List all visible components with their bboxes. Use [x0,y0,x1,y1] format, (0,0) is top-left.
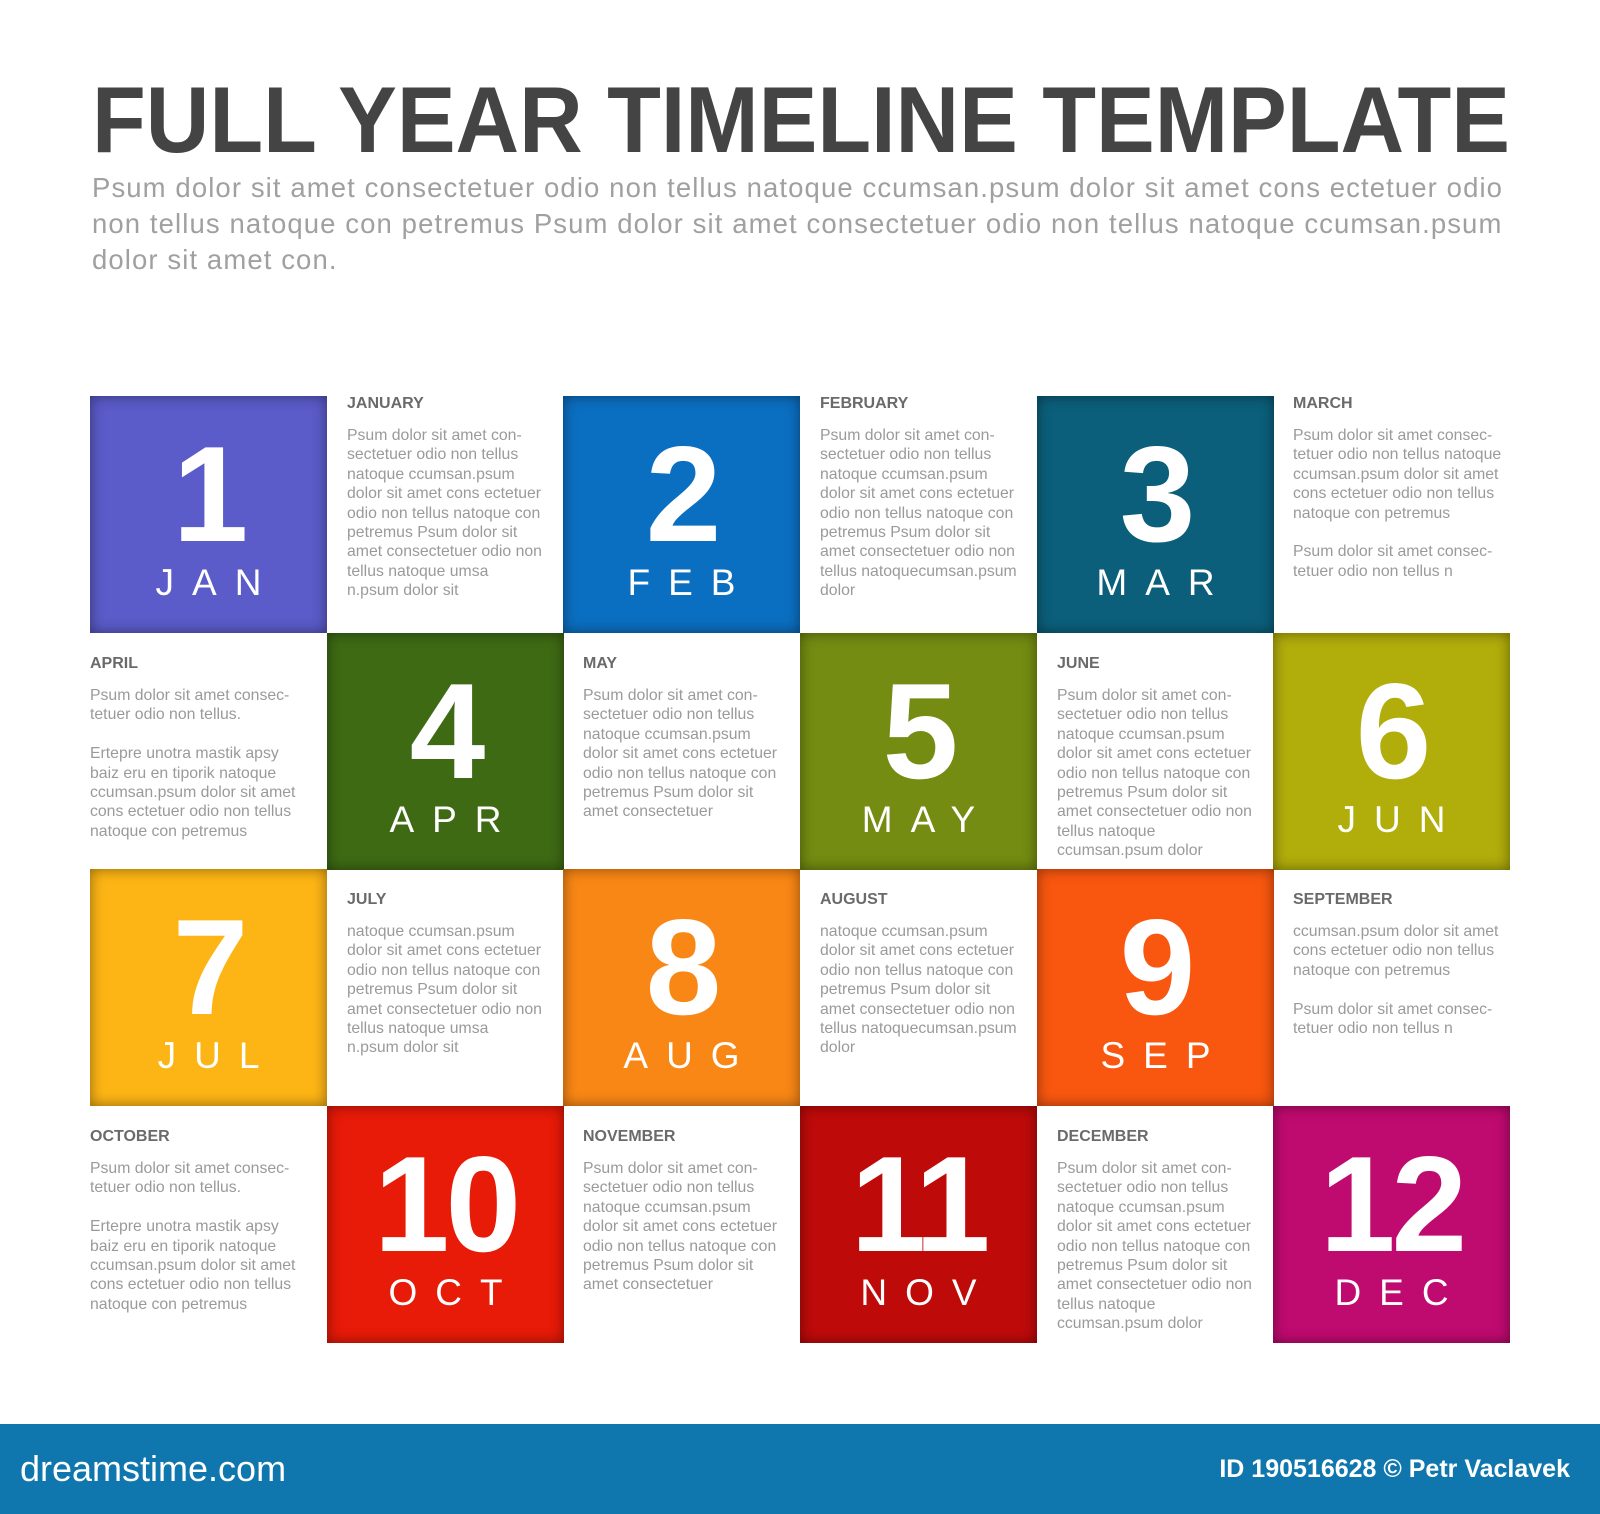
text: february: tellus natoquecumsan.psum [820,563,1017,580]
box: dec [1273,1106,1510,1343]
text: september: SEPTEMBER [1293,891,1393,908]
box: apr [327,633,564,870]
text: november: dolor sit amet cons ectetuer [583,1218,777,1235]
text: august: dolor [820,1039,855,1056]
text: september: ccumsan.psum dolor sit amet [1293,923,1498,940]
box: jan: JAN [156,562,279,603]
text: september: tetuer odio non tellus n [1293,1020,1453,1037]
text: may: amet consectetuer [583,803,713,820]
text: april: Psum dolor sit amet consec- [90,687,289,704]
text: july: amet consectetuer odio non [347,1001,542,1018]
box: may [800,633,1037,870]
text: july: n.psum dolor sit [347,1039,459,1056]
text: may: MAY [583,655,617,672]
box: mar: MAR [1096,562,1233,603]
box: aug: AUG [623,1035,758,1076]
text: june: ccumsan.psum dolor [1057,842,1203,859]
text: march: tetuer odio non tellus natoque [1293,446,1501,463]
text: november: NOVEMBER [583,1128,675,1145]
footer logo: dreamstime.com [20,1448,286,1489]
text: may: Psum dolor sit amet con- [583,687,758,704]
text: december: sectetuer odio non tellus [1057,1179,1228,1196]
box: feb: 2 [646,418,717,570]
text: november: natoque ccumsan.psum [583,1199,751,1216]
text: april: ccumsan.psum dolor sit amet [90,784,295,801]
text: december [1057,1128,1252,1332]
text: january: JANUARY [347,395,424,412]
text: may [583,655,777,820]
text: march: cons ectetuer odio non tellus [1293,485,1494,502]
text: november: sectetuer odio non tellus [583,1179,754,1196]
box: oct: OCT [388,1272,521,1313]
text: september [1293,891,1498,1037]
box: dec: DEC [1334,1272,1467,1313]
text: october: OCTOBER [90,1128,170,1145]
text: march: tetuer odio non tellus n [1293,563,1453,580]
box: jan [90,396,327,633]
text: november: amet consectetuer [583,1276,713,1293]
subtitle: dolor sit amet con. [92,244,338,275]
text: december: dolor sit amet cons ectetuer [1057,1218,1251,1235]
text: february: dolor [820,582,855,599]
text: may: dolor sit amet cons ectetuer [583,745,777,762]
text: april: cons ectetuer odio non tellus [90,803,291,820]
text: august: natoque ccumsan.psum [820,923,988,940]
box: sep [1037,869,1274,1106]
box: jun: JUN [1338,799,1463,840]
text: september: cons ectetuer odio non tellus [1293,942,1494,959]
text: may: odio non tellus natoque con [583,765,776,782]
text: september: natoque con petremus [1293,962,1450,979]
subtitle: non tellus natoque con petremus Psum dolor sit amet consectetuer odio non tellus natoque ccumsan.psum [92,208,1502,239]
text: august: amet consectetuer odio non [820,1001,1015,1018]
text: february: FEBRUARY [820,395,908,412]
text: june: Psum dolor sit amet con- [1057,687,1232,704]
text: january: natoque ccumsan.psum [347,466,515,483]
text: july [347,891,542,1056]
box: aug [563,869,800,1106]
text: october: cons ectetuer odio non tellus [90,1276,291,1293]
text: june [1057,655,1252,859]
text: october: tetuer odio non tellus. [90,1179,241,1196]
text: january: tellus natoque umsa [347,563,488,580]
text: january: Psum dolor sit amet con- [347,427,522,444]
box: sep: 9 [1120,891,1191,1043]
text: june: petremus Psum dolor sit [1057,784,1227,801]
box: oct: 10 [374,1128,517,1280]
text: february: petremus Psum dolor sit [820,524,990,541]
text: june: natoque ccumsan.psum [1057,726,1225,743]
text: september: Psum dolor sit amet consec- [1293,1001,1492,1018]
text: october: baiz eru en tiporik natoque [90,1238,276,1255]
text: april: baiz eru en tiporik natoque [90,765,276,782]
text: october: ccumsan.psum dolor sit amet [90,1257,295,1274]
text: august: dolor sit amet cons ectetuer [820,942,1014,959]
box: oct [327,1106,564,1343]
box: jul: JUL [158,1035,277,1076]
text: january: odio non tellus natoque con [347,505,540,522]
text: march: natoque con petremus [1293,505,1450,522]
box: nov: NOV [860,1272,995,1313]
box: jun: 6 [1356,655,1427,807]
text: june: amet consectetuer odio non [1057,803,1252,820]
text: august [820,891,1017,1056]
text: december: Psum dolor sit amet con- [1057,1160,1232,1177]
text: october: natoque con petremus [90,1296,247,1313]
text: june: odio non tellus natoque con [1057,765,1250,782]
box: nov [800,1106,1037,1343]
text: november [583,1128,777,1293]
text: february [820,395,1017,599]
text: august: AUGUST [820,891,888,908]
text: july: petremus Psum dolor sit [347,981,517,998]
text: december: amet consectetuer odio non [1057,1276,1252,1293]
text: june: dolor sit amet cons ectetuer [1057,745,1251,762]
text: march: MARCH [1293,395,1353,412]
text: july: JULY [347,891,386,908]
text: january: dolor sit amet cons ectetuer [347,485,541,502]
text: october: Ertepre unotra mastik apsy [90,1218,279,1235]
text: february: natoque ccumsan.psum [820,466,988,483]
text: april: Ertepre unotra mastik apsy [90,745,279,762]
text: november: Psum dolor sit amet con- [583,1160,758,1177]
text: april: tetuer odio non tellus. [90,706,241,723]
box: aug: 8 [646,891,717,1043]
text: may: sectetuer odio non tellus [583,706,754,723]
text: august: odio non tellus natoque con [820,962,1013,979]
text: february: odio non tellus natoque con [820,505,1013,522]
text: june: JUNE [1057,655,1100,672]
text: october: Psum dolor sit amet consec- [90,1160,289,1177]
text: january: amet consectetuer odio non [347,543,542,560]
text: november: petremus Psum dolor sit [583,1257,753,1274]
box: sep: SEP [1100,1035,1229,1076]
text: march: Psum dolor sit amet consec- [1293,543,1492,560]
box: feb [563,396,800,633]
text: december: odio non tellus natoque con [1057,1238,1250,1255]
text: january: n.psum dolor sit [347,582,459,599]
text: february: dolor sit amet cons ectetuer [820,485,1014,502]
box: apr: APR [389,799,520,840]
text: march [1293,395,1501,580]
text: june: tellus natoque [1057,823,1155,840]
text: june: sectetuer odio non tellus [1057,706,1228,723]
text: may: natoque ccumsan.psum [583,726,751,743]
text: april [90,655,296,840]
text: july: dolor sit amet cons ectetuer [347,942,541,959]
text: january: petremus Psum dolor sit [347,524,517,541]
footer id: ID 190516628 © Petr Vaclavek [1219,1455,1570,1483]
box: jun [1273,633,1510,870]
text: december: tellus natoque [1057,1296,1155,1313]
text: february: Psum dolor sit amet con- [820,427,995,444]
text: november: odio non tellus natoque con [583,1238,776,1255]
box: mar: 3 [1120,418,1191,570]
text: april: natoque con petremus [90,823,247,840]
box: feb: FEB [628,562,753,603]
text: july: tellus natoque umsa [347,1020,488,1037]
text: february: sectetuer odio non tellus [820,446,991,463]
box: jul [90,869,327,1106]
text: december: natoque ccumsan.psum [1057,1199,1225,1216]
footer [0,1424,1600,1514]
box: may: 5 [883,655,954,807]
box: mar [1037,396,1274,633]
box: jan: 1 [173,418,244,570]
box: jul: 7 [173,891,244,1043]
box: dec: 12 [1320,1128,1463,1280]
text: april: APRIL [90,655,138,672]
text: july: natoque ccumsan.psum [347,923,515,940]
text: february: amet consectetuer odio non [820,543,1015,560]
text: january [347,395,542,599]
subtitle: Psum dolor sit amet consectetuer odio non tellus natoque ccumsan.psum dolor sit amet cons ectetuer odio [92,172,1503,203]
text: october [90,1128,296,1313]
text: march: ccumsan.psum dolor sit amet [1293,466,1498,483]
text: may: petremus Psum dolor sit [583,784,753,801]
box: apr: 4 [410,655,481,807]
text: july: odio non tellus natoque con [347,962,540,979]
text: december: petremus Psum dolor sit [1057,1257,1227,1274]
subtitle [92,172,1503,275]
box: may: MAY [862,799,993,840]
text: december: ccumsan.psum dolor [1057,1315,1203,1332]
text: august: petremus Psum dolor sit [820,981,990,998]
box: nov: 11 [851,1128,986,1280]
text: december: DECEMBER [1057,1128,1149,1145]
text: january: sectetuer odio non tellus [347,446,518,463]
text: august: tellus natoquecumsan.psum [820,1020,1017,1037]
text: march: Psum dolor sit amet consec- [1293,427,1492,444]
